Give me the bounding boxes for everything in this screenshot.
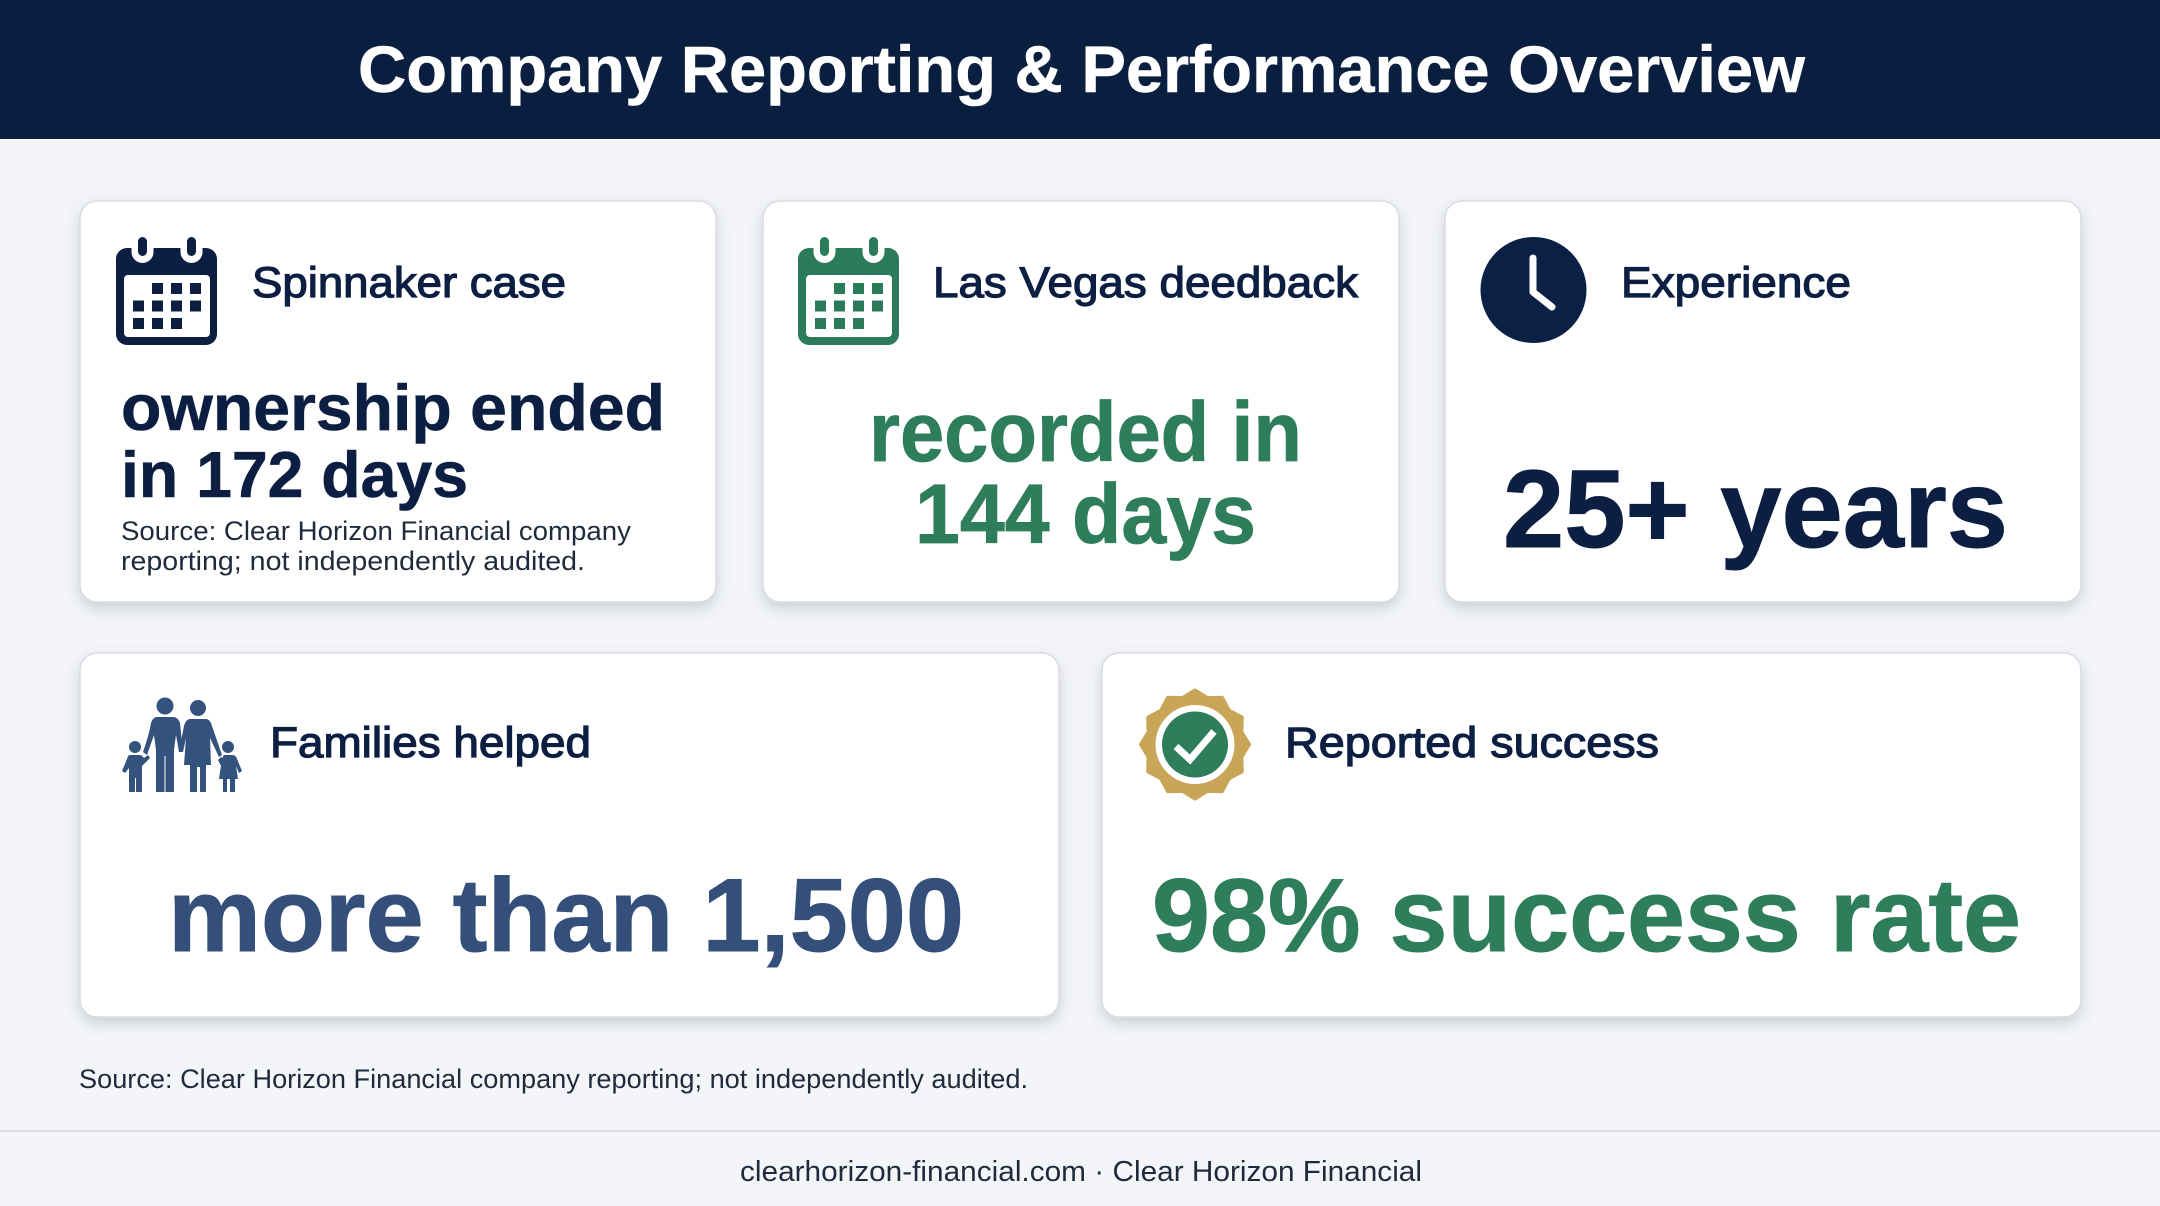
- source note: Source: Clear Horizon Financial company reporting; not independently audited.: [79, 1064, 1028, 1094]
- main stat: recorded in: [869, 385, 1302, 479]
- card heading: Spinnaker case: [252, 259, 566, 307]
- title: Company Reporting & Performance Overview: [358, 32, 1806, 106]
- main stat: 144 days: [915, 467, 1256, 561]
- main stat: in 172 days: [121, 438, 468, 511]
- footer text: clearhorizon-financial.com · Clear Horizon Financial: [740, 1156, 1422, 1188]
- card source note: reporting; not independently audited.: [121, 546, 585, 576]
- panel: Reported success: [1102, 653, 2081, 1017]
- icon: success badge: [1141, 690, 1249, 798]
- card heading: Families helped: [270, 719, 591, 767]
- main stat: 98% success rate: [1152, 858, 2021, 974]
- icon: family: [122, 698, 242, 792]
- panel: Las Vegas deedback: [763, 201, 1399, 602]
- main stat: 25+ years: [1503, 448, 2008, 571]
- card heading: Reported success: [1285, 719, 1659, 767]
- icon: navy calendar: [116, 228, 217, 345]
- card source note: Source: Clear Horizon Financial company: [121, 516, 631, 546]
- card source note: [121, 516, 631, 576]
- icon: clock: [1480, 237, 1586, 343]
- header banner: [0, 0, 2160, 139]
- panel: Spinnaker case: [80, 201, 716, 602]
- main stat: [869, 385, 1302, 561]
- icon: green calendar: [798, 228, 899, 345]
- main stat: more than 1,500: [168, 858, 964, 974]
- main stat: [121, 371, 665, 511]
- main stat: ownership ended: [121, 371, 665, 444]
- panel: Families helped: [80, 653, 1059, 1017]
- panel: Experience: [1445, 201, 2081, 602]
- card heading: Las Vegas deedback: [933, 259, 1359, 307]
- card heading: Experience: [1621, 259, 1851, 307]
